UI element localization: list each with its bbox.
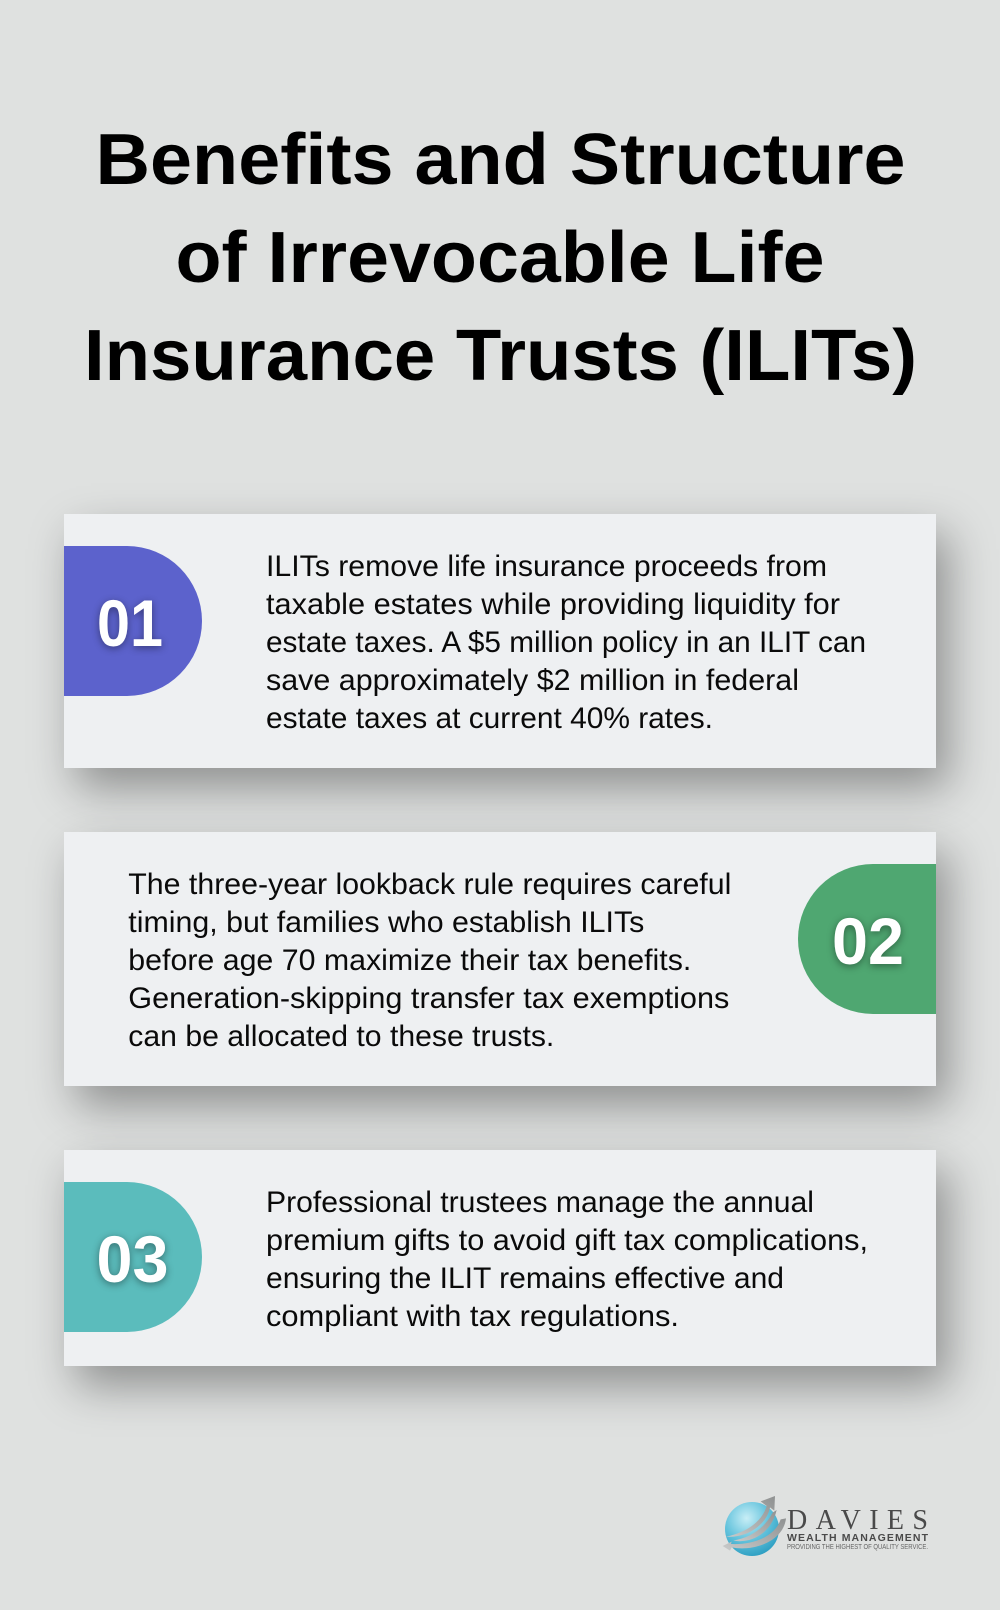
badge 03: compliant with tax regulations. (266, 1300, 679, 1333)
badge 02: timing, but families who establish ILITs (128, 906, 644, 939)
badge 01: estate taxes at current 40% rates. (266, 702, 713, 735)
badge 03: ensuring the ILIT remains effective and (266, 1262, 784, 1295)
badge 03 (64, 1182, 868, 1333)
badge 02: The three-year lookback rule requires careful (128, 868, 731, 901)
badge 01: save approximately $2 million in federal (266, 664, 799, 697)
badge 03: premium gifts to avoid gift tax complications, (266, 1224, 868, 1257)
badge 03: 03 (96, 1222, 168, 1296)
title (84, 120, 917, 396)
logo: Davies Wealth Management: PROVIDING THE HIGHEST OF QUALITY SERVICE. (787, 1544, 928, 1551)
title: Insurance Trusts (ILITs) (84, 316, 917, 396)
logo: Davies Wealth Management: WEALTH MANAGEMENT (787, 1532, 929, 1544)
panel: card 03 (64, 1150, 936, 1366)
badge 01: ILITs remove life insurance proceeds from (266, 550, 827, 583)
badge 02: 02 (832, 904, 904, 978)
panel: card 02 (64, 832, 936, 1086)
badge 01 (64, 546, 866, 735)
badge 02 (128, 864, 936, 1053)
badge 01: estate taxes. A $5 million policy in an ILIT can (266, 626, 866, 659)
logo: Davies Wealth Management: DAVIES (787, 1505, 928, 1536)
badge 03: Professional trustees manage the annual (266, 1186, 814, 1219)
badge 01: 01 (97, 586, 163, 660)
panel: card 01 (64, 514, 936, 768)
title: Benefits and Structure (96, 120, 906, 200)
title: of Irrevocable Life (176, 218, 824, 298)
badge 02: before age 70 maximize their tax benefits. (128, 944, 691, 977)
badge 02: can be allocated to these trusts. (128, 1020, 554, 1053)
badge 01: taxable estates while providing liquidity for (266, 588, 840, 621)
badge 02: Generation-skipping transfer tax exemptions (128, 982, 729, 1015)
